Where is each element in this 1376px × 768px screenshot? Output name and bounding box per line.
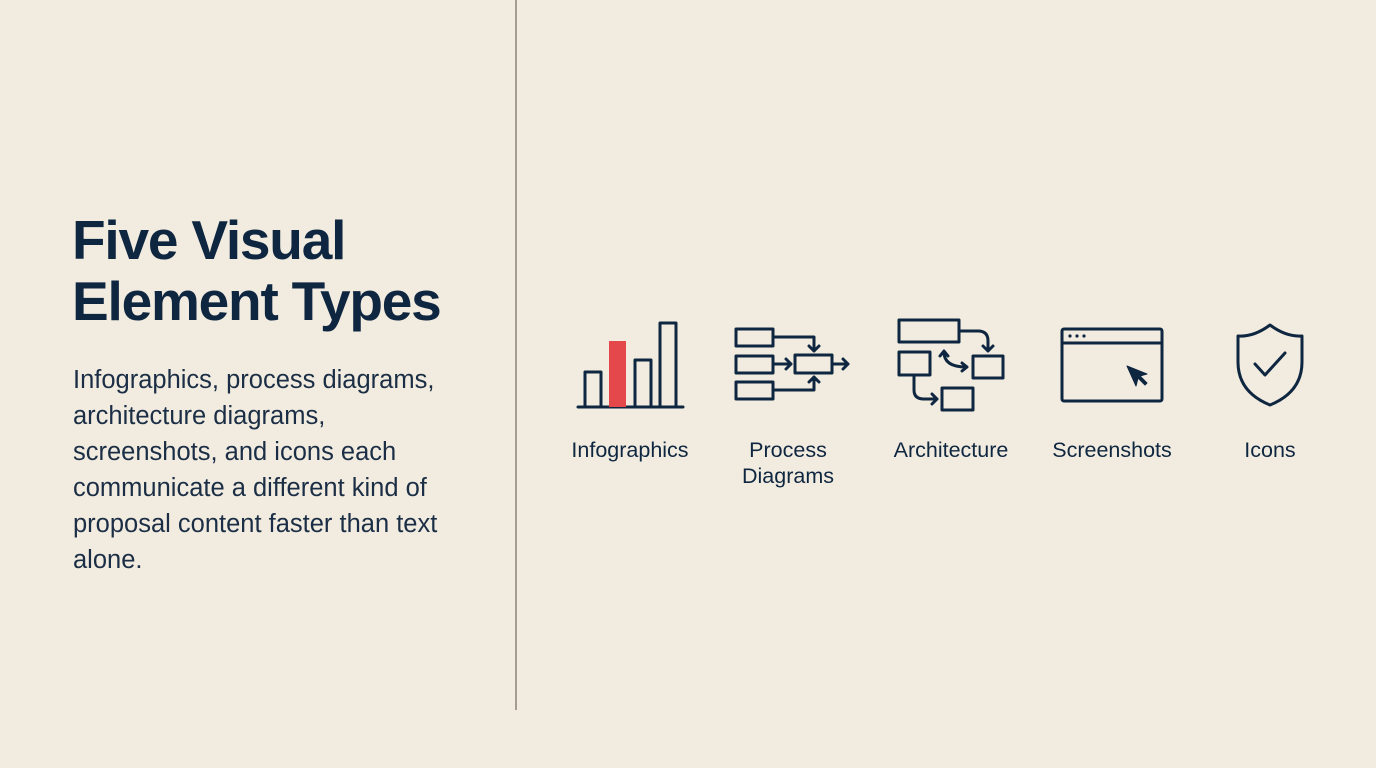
text block: description: Infographics, process diagrams,: [73, 366, 434, 394]
title: Five Visual: [72, 209, 345, 271]
label: Process Diagrams: Process: [749, 438, 827, 462]
icon: process diagram: [736, 329, 848, 399]
divider: [515, 0, 517, 710]
text block: description: proposal content faster than text: [73, 510, 437, 538]
label: Icons: Icons: [1244, 438, 1296, 462]
text block: description: alone.: [73, 546, 142, 574]
text block: description: architecture diagrams,: [73, 402, 325, 430]
label: Process Diagrams: Diagrams: [742, 464, 834, 488]
title: Element Types: [72, 270, 441, 332]
label: Infographics: Infographics: [571, 438, 689, 462]
icon: shield check: [1238, 325, 1302, 405]
icon: screenshot window: [1062, 329, 1162, 401]
text block: description: communicate a different kind of: [73, 474, 427, 502]
text block: description: screenshots, and icons each: [73, 438, 396, 466]
text block: description: [73, 366, 438, 574]
title: [72, 209, 441, 332]
label: Process Diagrams: [742, 438, 834, 488]
label: Screenshots: Screenshots: [1052, 438, 1172, 462]
label: Architecture: Architecture: [894, 438, 1008, 462]
icon: architecture: [899, 320, 1003, 410]
icon: bar chart: [578, 323, 683, 407]
